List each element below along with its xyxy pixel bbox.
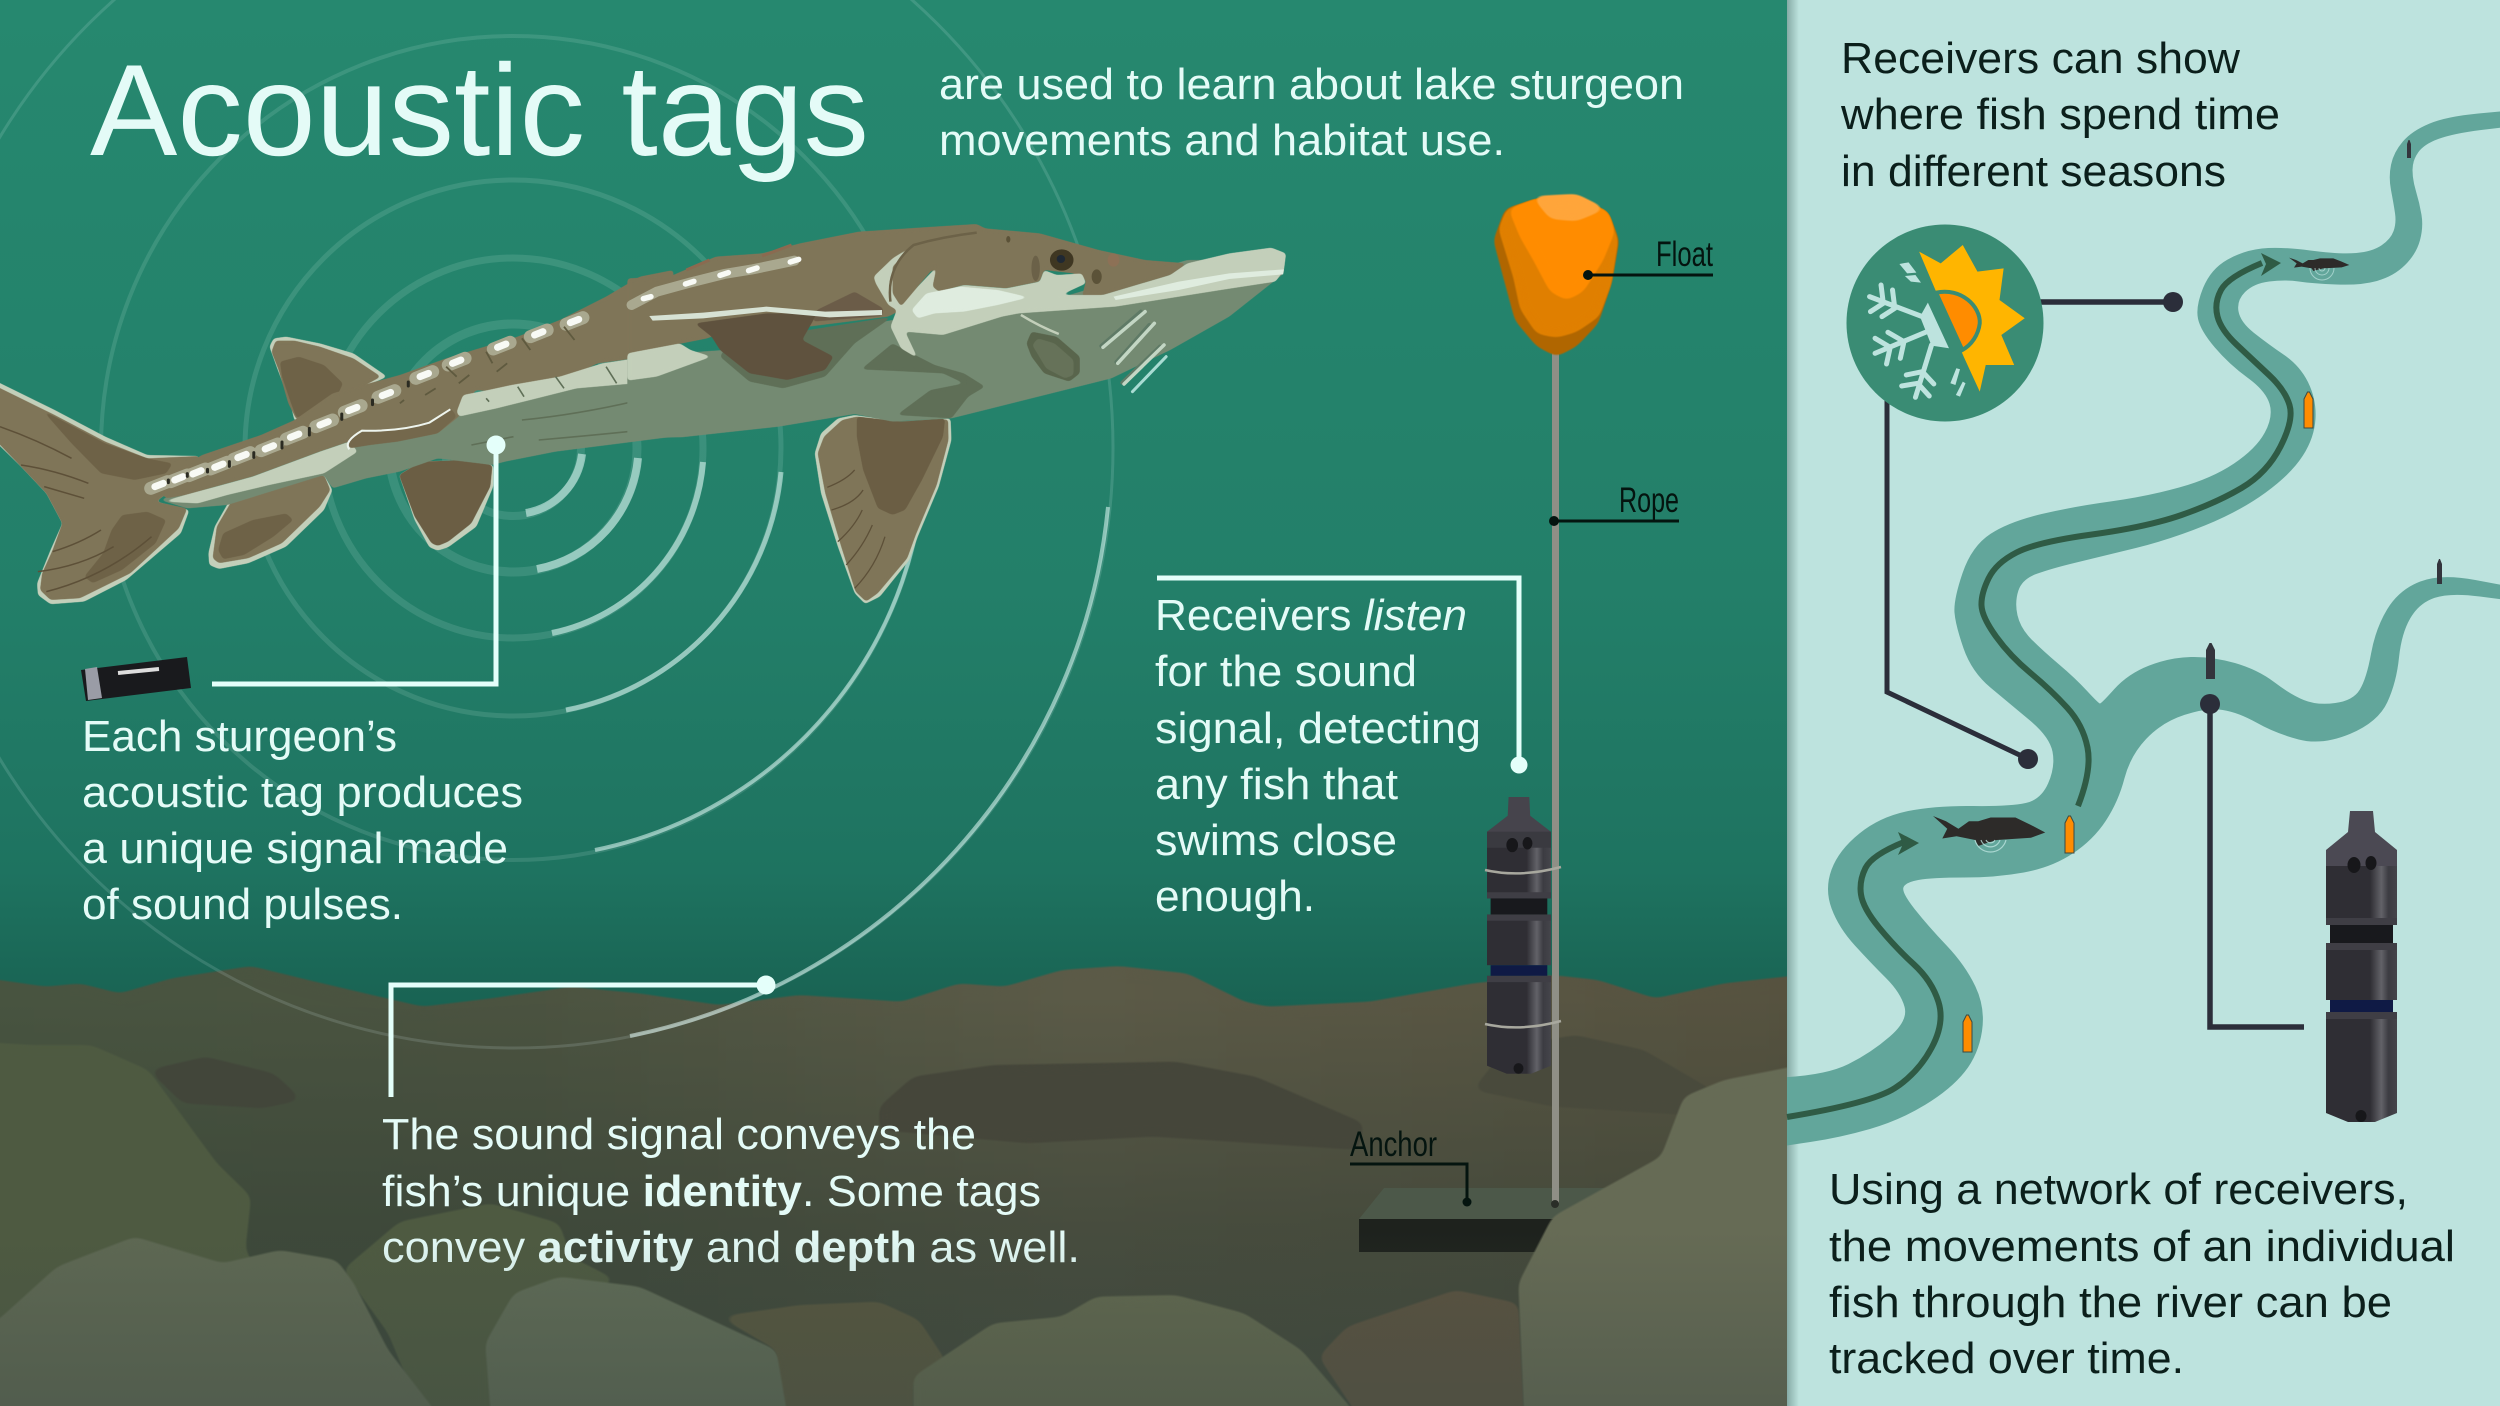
text: seasons: where fish spend time (1840, 90, 2280, 139)
front scutes (632, 259, 799, 305)
anchor block (1359, 1188, 1610, 1252)
text: sound signal identity: The sound signal conveys the (382, 1110, 976, 1159)
text: acoustic tag signal: a unique signal made (82, 824, 508, 873)
rear scutes (151, 318, 583, 488)
anchor knot (1551, 1200, 1559, 1208)
text: receivers listen: for the sound (1155, 647, 1417, 696)
text: network (1829, 1165, 2455, 1383)
text: sound signal identity (382, 1110, 1080, 1272)
subtitle (940, 68, 1682, 156)
text: sound signal identity: convey activity and depth as well. (382, 1223, 1080, 1272)
sturgeon rear half (0, 270, 673, 604)
text: network: the movements of an individual (1829, 1222, 2455, 1271)
flank marks (471, 366, 628, 446)
panel: river network (1780, 0, 2500, 1406)
icon: acoustic tag (81, 657, 191, 701)
dashes (1899, 262, 1966, 397)
subtitle: are used to learn about lake sturgeon (939, 60, 1684, 109)
callout line: tag to sturgeon (212, 436, 506, 684)
tail fin (0, 380, 200, 604)
lateral pits (400, 327, 575, 403)
river receivers: undetected (2206, 140, 2442, 679)
head markings (890, 233, 977, 302)
title: Acoustic tags (90, 37, 869, 183)
fish silhouette: large (1933, 816, 2045, 852)
subtitle: movements and habitat use. (939, 116, 1505, 165)
label: float (1583, 235, 1713, 280)
icon: seasons (1846, 224, 2044, 422)
text: acoustic tag signal: of sound pulses. (82, 880, 403, 929)
text: receivers listen: swims close (1155, 816, 1397, 865)
text: receivers listen: enough. (1155, 872, 1315, 921)
large receiver (2326, 811, 2397, 1122)
float (1493, 194, 1619, 357)
label: float: Float (1656, 235, 1713, 274)
sound wave rings (0, 0, 1113, 1048)
gill cover line (1021, 315, 1059, 334)
text: network: fish through the river can be (1829, 1278, 2392, 1327)
anal fin (208, 475, 333, 569)
fish silhouette: small (2289, 258, 2349, 280)
receiver straps (1485, 867, 1561, 1027)
text: network: tracked over time. (1829, 1334, 2184, 1383)
dorsal ridge blush (686, 245, 792, 270)
panel: underwater scene (0, 0, 1827, 1406)
label: anchor: Anchor (1350, 1125, 1437, 1164)
sun (1919, 245, 2025, 392)
callout line: receiver (1157, 578, 1528, 774)
callout line: sound signal (391, 976, 776, 1097)
text: acoustic tag signal (82, 712, 523, 929)
bottom shading (0, 1230, 1787, 1406)
connector: season icon to lower fish area (1887, 400, 2038, 769)
receiver on rope (1487, 797, 1551, 1074)
connector: river receiver to large receiver (2200, 694, 2304, 1027)
foreground rock right (1518, 1060, 1827, 1406)
text: seasons: in different seasons (1841, 147, 2226, 196)
sturgeon front half (627, 224, 1286, 604)
dorsal fin (269, 337, 387, 422)
label: rope: Rope (1619, 481, 1679, 520)
ventral fin (399, 460, 493, 551)
label: rope (1549, 481, 1679, 526)
front body (627, 224, 1286, 438)
fish path: upper (1981, 253, 2291, 806)
barbels (1101, 312, 1166, 392)
text: seasons: Receivers can show (1841, 34, 2240, 83)
text: receivers listen: signal, detecting (1155, 704, 1481, 753)
connector: season icon to fish area (2038, 292, 2183, 312)
illustration: lake sturgeon (0, 224, 1286, 604)
text: receivers listen: any fish that (1155, 760, 1398, 809)
fish path: lower (1787, 832, 1941, 1117)
snowflake (1870, 285, 1934, 397)
text: receivers listen (1155, 591, 1481, 921)
text: receivers listen: Receivers listen (1155, 591, 1467, 640)
eye (1050, 249, 1074, 271)
text: seasons (1840, 34, 2280, 196)
rope (1552, 350, 1559, 1203)
text: acoustic tag signal: Each sturgeon’s (82, 712, 397, 761)
pectoral fin (815, 415, 951, 604)
label: anchor (1350, 1125, 1472, 1206)
head spots (1108, 253, 1119, 267)
text: sound signal identity: fish’s unique identity. Some tags (382, 1167, 1041, 1216)
text: acoustic tag signal: acoustic tag produces (82, 768, 523, 817)
lake bed rocks (0, 966, 1815, 1406)
river receivers: detected (1963, 392, 2313, 1052)
text: network: Using a network of receivers, (1829, 1165, 2408, 1214)
gill plate (1026, 332, 1080, 382)
rear body (152, 270, 673, 508)
river (1780, 112, 2500, 1145)
